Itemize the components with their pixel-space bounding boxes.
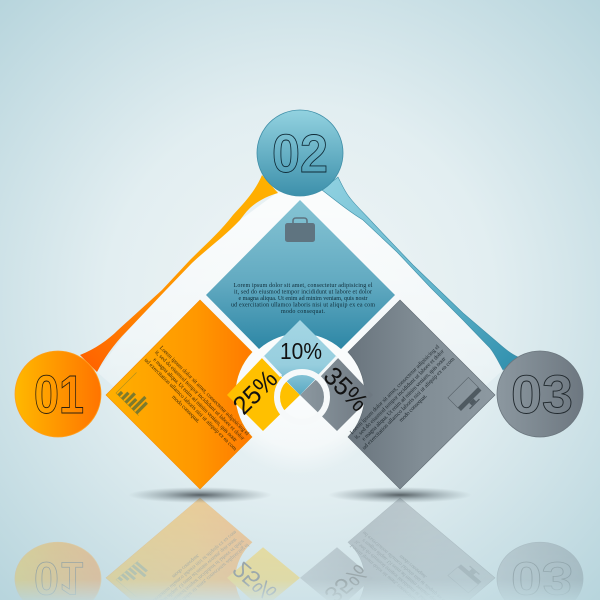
light band under connectors [97, 190, 503, 460]
label: 10%: 10% [280, 338, 322, 364]
text: blue panel: ud exercitation ullamco laboris nisi ut aliquip ex ea com [231, 302, 375, 308]
text: blue panel: modo consequat. [281, 309, 326, 315]
text: orange panel: ud exercitation ullamco laboris nisi ut aliquip ex ea com [143, 358, 238, 453]
icon: briefcase [285, 218, 315, 242]
connector: blue [322, 177, 518, 370]
circle 01 [15, 351, 101, 437]
icon: bar chart [116, 372, 159, 416]
number 01: 01 [34, 365, 84, 425]
text: gray panel: it, sed do eiusmod tempor incididunt ut labore et dolor [354, 349, 446, 441]
text: gray panel: ud exercitation ullamco laboris nisi ut aliquip ex ea com [362, 356, 457, 451]
text: gray panel: modo consequat. [398, 393, 429, 424]
segment: 35% [300, 358, 374, 431]
floor shadow: left [128, 487, 272, 503]
text: orange panel [138, 344, 252, 457]
segment: 25% [227, 358, 300, 431]
number 03: 03 [511, 365, 573, 425]
text: orange panel: Lorem ipsum dolor sit amet, consectetur adipisicing el [158, 345, 250, 437]
text: gray panel [348, 342, 461, 456]
panel: blue [206, 200, 395, 349]
panel: gray [348, 300, 495, 489]
connector: orange [80, 175, 278, 372]
text: blue panel: Lorem ipsum dolor sit amet, consectetur adipisicing el [234, 283, 373, 289]
icon: monitor [448, 377, 485, 415]
label: 25%: 25% [227, 364, 283, 420]
text: blue panel: e magna aliqua. Ut enim ad minim veniam, quis nostr [238, 296, 368, 302]
segment: 10% [263, 320, 337, 395]
hub glow [210, 295, 390, 475]
text: orange panel: it, sed do eiusmod tempor incididunt ut labore et dolor [153, 350, 245, 442]
number 02: 02 [272, 124, 328, 184]
text: gray panel: Lorem ipsum dolor sit amet, consectetur adipisicing el [349, 344, 441, 436]
panel: orange [106, 300, 252, 489]
label: 35%: 35% [318, 361, 374, 417]
text: blue panel [231, 283, 375, 315]
text: gray panel: e magna aliqua. Ut enim ad minim veniam, quis nostr [361, 356, 447, 442]
text: orange panel: modo consequat. [170, 394, 201, 425]
floor shadow: right [328, 487, 472, 503]
circle 03 [497, 351, 583, 437]
text: orange panel: e magna aliqua. Ut enim ad minim veniam, quis nostr [152, 357, 238, 443]
reflection [14, 498, 584, 600]
hub ring [277, 372, 327, 422]
text: blue panel: it, sed do eiusmod tempor incididunt ut labore et dolor [234, 290, 372, 296]
circle 02 [257, 110, 343, 196]
